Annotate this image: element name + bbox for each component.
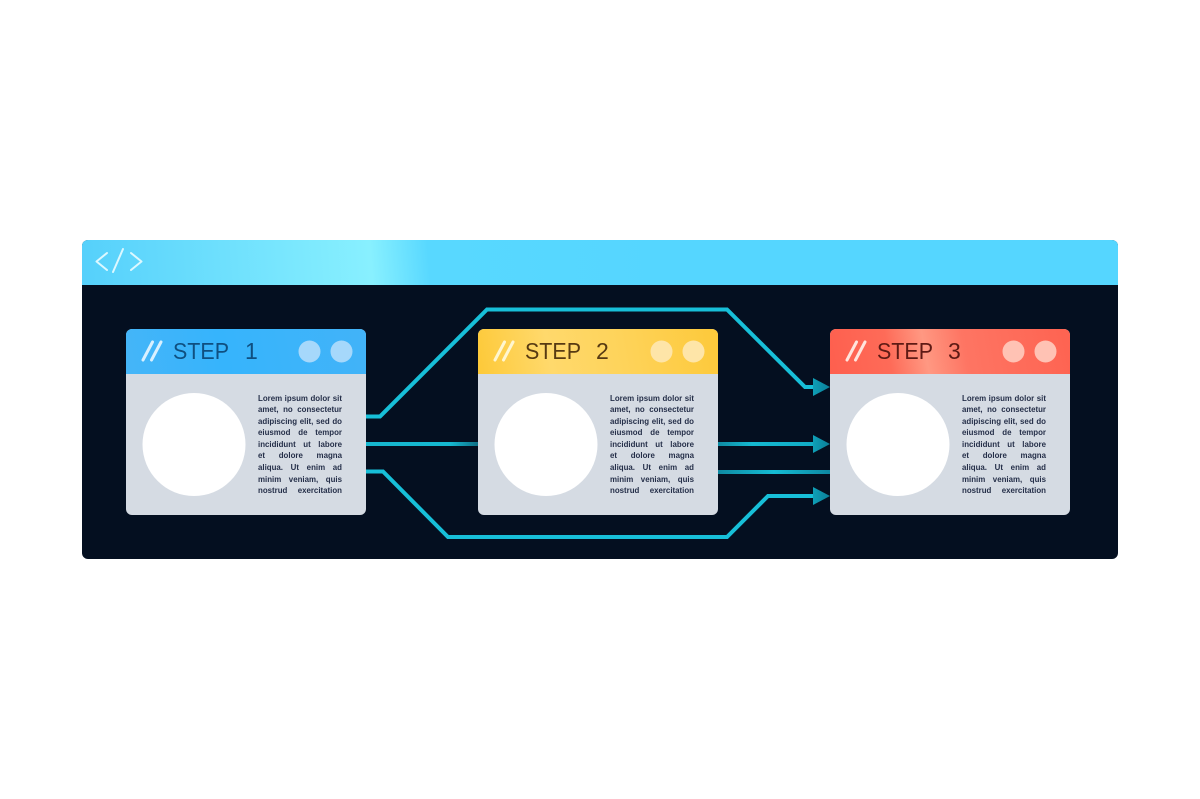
step 2 body text: amet, no consectetur	[610, 405, 694, 414]
step 1 body text: et dolore magna	[258, 451, 342, 460]
step 3 window dots	[1002, 340, 1056, 362]
step 1 body text: amet, no consectetur	[258, 405, 342, 414]
step 3 slashes	[847, 342, 865, 360]
panel: step 3	[830, 329, 1070, 515]
step 2 body text: nostrud exercitation	[610, 486, 694, 495]
step 3 body text: eiusmod de tempor	[962, 428, 1046, 437]
step 2 window dots	[650, 340, 704, 362]
step 3 body text: amet, no consectetur	[962, 405, 1046, 414]
step 3 body text: minim veniam, quis	[962, 475, 1046, 484]
step 2 header	[478, 329, 718, 374]
main dark panel	[82, 240, 1118, 559]
step 1 image circle	[142, 393, 246, 496]
step 2 body text: Lorem ipsum dolor sit	[610, 394, 694, 402]
step 1 header	[126, 329, 366, 374]
step 2 body text: minim veniam, quis	[610, 475, 694, 484]
step 2 heading: 2	[596, 338, 609, 364]
connector: step 2 to step 3 plain	[718, 470, 830, 474]
step 3 body text: nostrud exercitation	[962, 486, 1046, 495]
panel: step 1	[126, 329, 366, 515]
step 2 heading: STEP	[525, 338, 581, 364]
step 1 body text: minim veniam, quis	[258, 475, 342, 484]
step 2 image circle	[494, 393, 598, 496]
step 2 body text: et dolore magna	[610, 451, 694, 460]
step 2 body text: incididunt ut labore	[610, 440, 694, 449]
step 1 body text: eiusmod de tempor	[258, 428, 342, 437]
step 1 heading: 1	[245, 338, 258, 364]
step 3 body text: aliqua. Ut enim ad	[962, 463, 1046, 472]
step 2 slashes	[495, 342, 513, 360]
step 3 image circle	[846, 393, 950, 496]
step 3 body text: Lorem ipsum dolor sit	[962, 394, 1046, 402]
step 2 body text	[610, 394, 694, 495]
step 1 body text: nostrud exercitation	[258, 486, 342, 495]
step 1 body text: Lorem ipsum dolor sit	[258, 394, 342, 402]
icon: code brackets	[96, 249, 142, 272]
step 1 heading: STEP	[173, 338, 229, 364]
step 3 header	[830, 329, 1070, 374]
step 2 body text: aliqua. Ut enim ad	[610, 463, 694, 472]
step 3 body text	[962, 394, 1046, 495]
step 3 body text: adipiscing elit, sed do	[962, 417, 1046, 426]
step 1 slashes	[143, 342, 161, 360]
connector: step 2 to step 3 with arrow	[718, 435, 830, 453]
step 1 window dots	[298, 340, 352, 362]
step 1 body text: aliqua. Ut enim ad	[258, 463, 342, 472]
connector: step 1 to step 2	[366, 442, 478, 446]
panel title bar	[82, 240, 1118, 285]
connector: step 1 to step 3 upper route	[366, 310, 830, 416]
panel: step 2	[478, 329, 718, 515]
step 3 heading: STEP	[877, 338, 933, 364]
step 1 body text: adipiscing elit, sed do	[258, 417, 342, 426]
step 1 body text	[258, 394, 342, 495]
step 1 body text: incididunt ut labore	[258, 440, 342, 449]
step 3 body text: incididunt ut labore	[962, 440, 1046, 449]
step 3 heading: 3	[948, 338, 961, 364]
step 2 body text: eiusmod de tempor	[610, 428, 694, 437]
step 3 body text: et dolore magna	[962, 451, 1046, 460]
step 2 body text: adipiscing elit, sed do	[610, 417, 694, 426]
connector: step 1 to step 3 lower route	[366, 472, 830, 537]
